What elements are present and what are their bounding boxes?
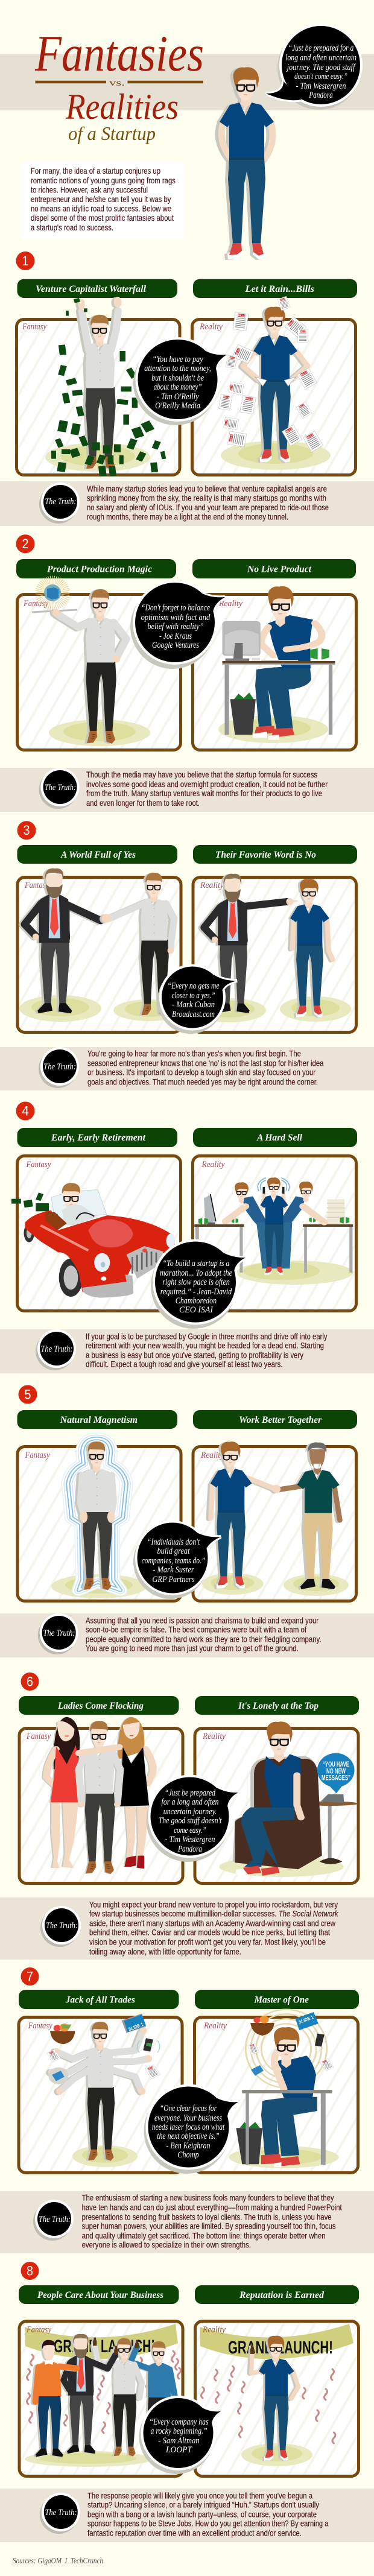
left desk with monitor — [194, 1194, 244, 1275]
title — [34, 25, 204, 144]
quote bubble 6: “Just be prepared — [165, 1788, 215, 1798]
flying money — [11, 1192, 59, 1224]
section 8 — [0, 2262, 374, 2542]
heading: reality 4: A Hard Sell — [256, 1133, 303, 1143]
panel: reality 3: Reality — [200, 881, 224, 890]
panel: fantasy 2 — [17, 595, 181, 750]
panel: fantasy 6: Fantasy — [26, 1732, 51, 1741]
header band — [0, 54, 374, 110]
heading: reality 7 — [195, 1990, 359, 2009]
heading: fantasy 7 — [19, 1990, 179, 2009]
illustration: man stretched across three tasks — [194, 1177, 353, 1285]
section 4 — [0, 1101, 374, 1373]
quote bubble 3: closer to a yes.” — [171, 991, 215, 1001]
number 4 — [16, 1101, 35, 1121]
slide label: reality: SLIDE 1 — [297, 2014, 314, 2025]
panel: fantasy 8 — [19, 2321, 183, 2476]
number 1: 1 — [22, 253, 28, 268]
headlights — [94, 1234, 175, 1281]
quote bubble 6: - Tim Westergren — [165, 1835, 215, 1844]
illustration: red sports car — [11, 1183, 176, 1298]
header quote bubble: doesn't come easy.” — [294, 72, 347, 81]
illustration: reality man at desk — [223, 586, 335, 740]
the truth 5: You are going to need more than just your charm to get off the ground. — [86, 1643, 299, 1653]
slide label: fantasy: SLIDE 1 — [127, 2022, 144, 2032]
the truth 8 — [0, 2489, 374, 2542]
quote bubble 5: - Mark Suster — [153, 1565, 194, 1575]
character: fantasy man with beer — [93, 2337, 142, 2457]
heading: fantasy 6 — [19, 1696, 179, 1715]
heading: reality 4 — [193, 1128, 357, 1147]
quote bubble 8: LOOPT — [165, 2445, 192, 2455]
sources: Sources: GigaOM I TechCrunch — [13, 2557, 103, 2566]
quote bubble 2: optimism with fact and — [141, 613, 211, 622]
panel: reality 4 — [193, 1156, 356, 1311]
the truth 1: sprinkling money from the sky, the reality is that many startups go months with — [87, 493, 326, 503]
character: fantasy man shaking hands — [102, 873, 174, 1016]
center figure with phones — [258, 1177, 290, 1275]
concentric focus rings — [246, 2010, 327, 2088]
the truth 3: seasoned entrepreneur knows that one ‘no’ is not the last stop for his/her idea — [87, 1058, 324, 1068]
the truth 3: or business. It's important to develop a tough skin and stay focused on your — [87, 1068, 315, 1077]
car body — [25, 1210, 176, 1292]
title: Realities — [65, 87, 179, 127]
panel: reality 7 — [194, 2017, 358, 2173]
number 1 — [16, 252, 35, 270]
number 6: 6 — [27, 1674, 33, 1689]
quote bubble 7: needs laser focus on what — [152, 2122, 225, 2132]
trash can — [236, 2122, 262, 2164]
the truth 5: Assuming that all you need is passion and charisma to build and expand your — [86, 1615, 319, 1625]
the truth 3 — [0, 1047, 374, 1090]
number 8: 8 — [27, 2263, 33, 2279]
heading: fantasy 7: Jack of All Trades — [65, 1995, 135, 2005]
the truth 4: The Truth: — [41, 1344, 72, 1354]
quote bubble 5: build great — [157, 1546, 190, 1556]
quote bubble 1: O'Reilly Media — [155, 401, 200, 411]
fantasy man — [78, 1721, 120, 1874]
number 2 — [16, 534, 35, 553]
header quote bubble — [266, 24, 363, 110]
heading: fantasy 8: People Care About Your Business — [37, 2290, 163, 2300]
number 7: 7 — [27, 1969, 33, 1984]
trash can — [230, 692, 256, 735]
heading: reality 2: No Live Product — [247, 565, 312, 574]
illustration: focused man at desk — [229, 2010, 338, 2168]
heading: fantasy 4 — [17, 1128, 177, 1147]
quote bubble 3: - Mark Cuban — [172, 1000, 215, 1010]
the truth 2: from the truth. Many startup ventures wait months for their products to go live — [86, 788, 322, 798]
heading: fantasy 6: Ladies Come Flocking — [57, 1701, 144, 1711]
the truth 6: vision be your motivation for profit won't get you very far. Most likely, you'll be — [89, 1937, 326, 1947]
quote bubble 2 — [130, 580, 225, 669]
the truth 2: Though the media may have you believe that the startup formula for success — [86, 770, 317, 779]
woman in black — [118, 1717, 153, 1869]
heading: fantasy 1: Venture Capitalist Waterfall — [36, 284, 147, 294]
heading: reality 6: It's Lonely at the Top — [238, 1701, 319, 1711]
character: second team member — [276, 1442, 340, 1589]
banner: fantasy — [25, 2324, 178, 2359]
the truth 8: The response people will likely give you once you tell them you've begun a — [87, 2491, 312, 2501]
seated legs — [253, 667, 311, 740]
panel: reality 1 — [192, 320, 356, 475]
the truth 5: soon-to-be empire is false. The best companies were built with a team of — [86, 1625, 306, 1635]
the truth 8: startup? Uncaring silence, or a barely intrigued “Huh.” Startups don't usually — [87, 2499, 319, 2509]
panel: fantasy 5: Fantasy — [25, 1451, 50, 1460]
driver — [62, 1183, 95, 1226]
the truth 7 — [0, 2191, 374, 2253]
illustration: lonely man in armchair — [233, 1721, 358, 1876]
the truth 4 — [0, 1329, 374, 1373]
panel: reality 6: Reality — [202, 1732, 226, 1741]
character: reality man handshake — [211, 1441, 280, 1589]
quote bubble 1: attention to the money, — [144, 364, 211, 373]
the truth 4: a business is easy but once you've started, getting to profitability is very — [86, 1350, 303, 1359]
the truth 6: toiling away alone, with little opportunity for fame. — [89, 1947, 241, 1957]
the truth 4: retirement with your new wealth, you might be headed for a dead end. Starting — [86, 1340, 324, 1350]
character: fantasy man glowing — [80, 1441, 115, 1590]
panel: fantasy 2: Fantasy — [23, 599, 48, 609]
quote bubble 7: - Ben Keighran — [166, 2141, 210, 2151]
panel: fantasy 7 — [19, 2017, 182, 2173]
seated hero — [236, 1721, 301, 1876]
panel: fantasy 4 — [17, 1156, 181, 1311]
panel: reality 6 — [195, 1729, 358, 1883]
quote bubble 8: a rocky beginning.” — [151, 2426, 208, 2436]
panel: reality 5 — [193, 1446, 356, 1601]
panel: reality 4: Reality — [201, 1160, 225, 1169]
header quote bubble: long and often uncertain — [285, 53, 357, 63]
header quote bubble: journey. The good stuff — [286, 63, 356, 72]
heading: reality 5: Work Better Together — [239, 1415, 322, 1425]
the truth 2 — [0, 768, 374, 812]
intro text block: romantic notions of young guns going from rags — [31, 176, 176, 185]
panel: reality 8 — [195, 2321, 358, 2476]
number 3: 3 — [23, 823, 30, 838]
intro text block: a startup's road to success. — [31, 223, 113, 232]
title: of a Startup — [68, 122, 156, 144]
number 5: 5 — [24, 1387, 31, 1402]
heading: reality 8 — [195, 2285, 359, 2304]
panel: fantasy 7: Fantasy — [28, 2021, 52, 2031]
heading: fantasy 3: A World Full of Yes — [60, 850, 136, 860]
heading: reality 6 — [195, 1696, 359, 1715]
number 8 — [21, 2262, 39, 2280]
the truth 7: The Truth: — [39, 2215, 71, 2224]
quote bubble 3: Broadcast.com — [172, 1010, 215, 1019]
the truth 1: The Truth: — [45, 497, 76, 507]
heading: reality 1: Let it Rain...Bills — [244, 284, 314, 294]
quote bubble 2: “Don't forget to balance — [141, 603, 210, 613]
panel: reality 1: Reality — [199, 322, 223, 332]
quote bubble 6: uncertain journey. — [163, 1807, 217, 1817]
heading: reality 1 — [193, 279, 357, 298]
balloon text: “YOU HAVE — [323, 1760, 349, 1768]
quote bubble 6: The good stuff doesn't — [159, 1816, 222, 1826]
quote bubble 6 — [146, 1774, 238, 1862]
quote bubble 5: “Individuals don't — [147, 1537, 200, 1547]
character: reality man rejected — [290, 879, 333, 1017]
quote bubble 7 — [144, 2084, 238, 2174]
section 1 — [0, 252, 374, 526]
fruit basket — [50, 2024, 75, 2044]
the truth 1: rough months, there may be a light at the end of the money tunnel. — [87, 511, 288, 521]
quote bubble 2: Google Ventures — [152, 641, 199, 650]
slide book — [122, 2013, 146, 2033]
the truth 3: You're going to hear far more no's than yes's when you first begin. The — [87, 1048, 301, 1058]
panel: reality 3 — [192, 877, 356, 1033]
number 7 — [21, 1967, 39, 1986]
the truth 8: The Truth: — [45, 2508, 77, 2517]
character: investor with beer — [63, 2334, 118, 2454]
torso and arms — [274, 2051, 316, 2098]
computer — [223, 621, 298, 661]
quote bubble 8: “Every company has — [150, 2417, 209, 2427]
quote bubble 5 — [133, 1521, 221, 1599]
quote bubble 1: - Tim O'Reilly — [157, 392, 199, 402]
quote bubble 4: marathon... To adopt the — [160, 1268, 232, 1278]
heading: fantasy 1 — [17, 279, 177, 298]
heading: fantasy 4: Early, Early Retirement — [51, 1133, 146, 1143]
objects juggled: fantasy — [47, 2013, 160, 2084]
quote bubble 3 — [157, 964, 237, 1034]
quote bubble 4: Chamboredon — [176, 1296, 217, 1306]
heading: fantasy 2: Product Production Magic — [46, 565, 152, 574]
heading: fantasy 3 — [17, 845, 177, 864]
side figures — [226, 1196, 325, 1268]
heading: reality 3 — [193, 845, 357, 864]
intro text block: dispel some of the most prolific fantasies about — [31, 213, 174, 223]
the truth 4: difficult. Expect a tough road and give yourself at least two years. — [86, 1359, 282, 1369]
quote bubble 1: but it shouldn't be — [151, 373, 204, 383]
intro text block: no means an idyllic road to success. Below we — [31, 204, 171, 214]
grille — [127, 1246, 163, 1279]
quote bubble 4: required.” - Jean-David — [160, 1287, 232, 1297]
quote bubble 6: come easy.” — [174, 1826, 206, 1835]
character: reality man alone with beer — [250, 2336, 299, 2461]
section 5 — [0, 1385, 374, 1657]
header character — [220, 67, 274, 259]
panel: fantasy 4: Fantasy — [26, 1160, 51, 1169]
wheels — [24, 1224, 83, 1297]
quote bubble 2: - Joe Kraus — [159, 631, 192, 641]
the truth 8: fantastic reputation over time with an excellent product and/or service. — [87, 2528, 302, 2538]
the truth 1 — [0, 481, 374, 526]
armchair — [233, 1756, 320, 1868]
the truth 5 — [0, 1613, 374, 1657]
quote bubble 7: “One clear focus for — [160, 2104, 217, 2113]
windshield — [51, 1190, 107, 1220]
quote bubble 2: belief with reality” — [147, 622, 204, 631]
number 5 — [18, 1385, 37, 1404]
heading: fantasy 8 — [19, 2285, 179, 2304]
panel: fantasy 6 — [19, 1729, 183, 1883]
quote bubble 3: “Every no gets me — [168, 981, 220, 991]
heading: reality 7: Master of One — [254, 1995, 309, 2005]
banner: fantasy: GRAND LAUNCH! — [54, 2337, 155, 2356]
bumper — [82, 1274, 133, 1298]
heading: fantasy 2 — [16, 559, 176, 578]
the truth 6: The Truth: — [46, 1921, 78, 1931]
panel: reality 7: Reality — [203, 2021, 227, 2031]
character: investor pointing away — [204, 874, 300, 1013]
character: man with six arms — [48, 2022, 152, 2161]
falling bills — [218, 296, 323, 452]
quote bubble 1 — [133, 337, 227, 425]
banner: reality — [200, 2324, 353, 2359]
tee and arms — [261, 615, 322, 668]
heading: reality 3: Their Favorite Word is No — [215, 850, 316, 860]
balloon text: MESSAGES” — [322, 1773, 350, 1782]
intro text block: For many, the idea of a startup conjures up — [31, 166, 160, 176]
quote bubble 8: - Sam Altman — [158, 2436, 200, 2446]
message balloon — [317, 1753, 355, 1793]
quote bubble 5: GRP Partners — [152, 1575, 195, 1584]
heading: fantasy 5: Natural Magnetism — [60, 1415, 138, 1425]
intro text block: to riches. However, ask any successful — [31, 185, 148, 194]
confetti: fantasy — [27, 2351, 181, 2433]
desk — [242, 2090, 332, 2165]
heading: fantasy 5 — [17, 1410, 177, 1429]
title: vs. — [109, 78, 125, 88]
character: investor shaking hands — [25, 869, 101, 1013]
intro text block — [20, 162, 185, 240]
quote bubble 4: CEO ISAI — [179, 1305, 214, 1315]
quote bubble 6: for a long and often — [162, 1797, 218, 1807]
header quote bubble: “Just be prepared for a — [288, 43, 353, 53]
the truth 7: everyone is allowed to specialize in their own strengths. — [82, 2240, 251, 2250]
panel: fantasy 1 — [17, 320, 180, 475]
title: Fantasies — [34, 25, 204, 82]
legs — [261, 2097, 317, 2167]
section 2 — [0, 534, 374, 812]
heading: reality 2 — [192, 559, 356, 578]
number 4: 4 — [22, 1104, 29, 1118]
panel: fantasy 1: Fantasy — [22, 322, 46, 332]
the truth 3: The Truth: — [43, 1062, 76, 1072]
quote bubble 4: “To build a startup is a — [163, 1259, 229, 1268]
quote bubble 5: companies, teams do.” — [142, 1556, 205, 1566]
heading: reality 8: Reputation is Earned — [239, 2290, 325, 2300]
panel: fantasy 3 — [17, 877, 185, 1033]
panel: fantasy 5 — [17, 1446, 181, 1601]
quote bubble 7: the next objective is.” — [157, 2131, 220, 2141]
the truth 6: few startup businesses become multimillion-dollar successes. The Social Network — [89, 1908, 338, 1918]
banner: reality: Reality — [202, 2325, 226, 2335]
character: reality man empty pockets — [243, 306, 308, 463]
quote bubble 8 — [139, 2396, 221, 2474]
magnetic aura — [68, 1438, 127, 1590]
falling money — [51, 298, 166, 476]
number 2: 2 — [22, 536, 29, 551]
right desk with papers — [303, 1199, 353, 1273]
character: blue sweater man — [130, 2340, 175, 2451]
quote bubble 6: Pandora — [177, 1844, 202, 1854]
character: orange sweater man — [36, 2340, 77, 2457]
quote bubble 4 — [151, 1239, 246, 1329]
the truth 2: and even longer for them to take root. — [86, 798, 200, 808]
character: fantasy man with tray — [52, 589, 127, 744]
the truth 7: and quality ultimately get sacrificed. The bottom line: things operate better when — [82, 2230, 326, 2240]
icon: glowing product box on tray — [32, 581, 77, 612]
balloon text: NO NEW — [326, 1767, 346, 1776]
panel: reality 2: Reality — [218, 599, 242, 609]
the truth 3: goals and objectives. That much needed yes may be right around the corner. — [87, 1077, 318, 1087]
the truth 2: The Truth: — [45, 783, 76, 793]
quote bubble 1: about the money” — [154, 382, 202, 392]
the truth 5: The Truth: — [43, 1628, 75, 1638]
number 6 — [21, 1673, 39, 1691]
quote bubble 7: everyone. Your business — [154, 2113, 222, 2123]
header quote bubble: Pandora — [308, 90, 333, 100]
balloon text — [322, 1760, 350, 1782]
section 6 — [0, 1673, 374, 1960]
quote bubble 7: Chomp — [177, 2150, 199, 2160]
panel: reality 2 — [193, 595, 356, 750]
section 3 — [0, 821, 374, 1090]
the truth 5: people equally committed to hard work as they are to their fledgling company. — [86, 1635, 322, 1644]
confetti: reality — [201, 2366, 335, 2443]
banner: fantasy: Fantasy — [26, 2325, 51, 2335]
header quote bubble: - Tim Westergren — [296, 81, 346, 91]
number 3 — [17, 821, 36, 840]
side table with phone — [304, 1794, 358, 1864]
panel: fantasy 3: Fantasy — [24, 881, 49, 890]
panel: reality 5: Reality — [200, 1451, 224, 1460]
objects ignored — [248, 2012, 334, 2076]
section 7 — [0, 1967, 374, 2253]
characters: two women and fantasy man — [46, 1717, 153, 1874]
the truth 8: begin with a bang or a lavish launch party–unless, of course, your corporate — [87, 2509, 317, 2519]
woman in red — [46, 1717, 80, 1868]
heading: reality 5 — [193, 1410, 357, 1429]
intro text block: entrepreneur and he/she can tell you it was by — [31, 194, 171, 204]
the truth 6 — [0, 1897, 374, 1960]
character: fantasy man arms raised — [78, 297, 121, 469]
quote bubble 1: “You have to pay — [153, 355, 203, 364]
quote bubble 4: right slow pace is often — [162, 1277, 230, 1287]
